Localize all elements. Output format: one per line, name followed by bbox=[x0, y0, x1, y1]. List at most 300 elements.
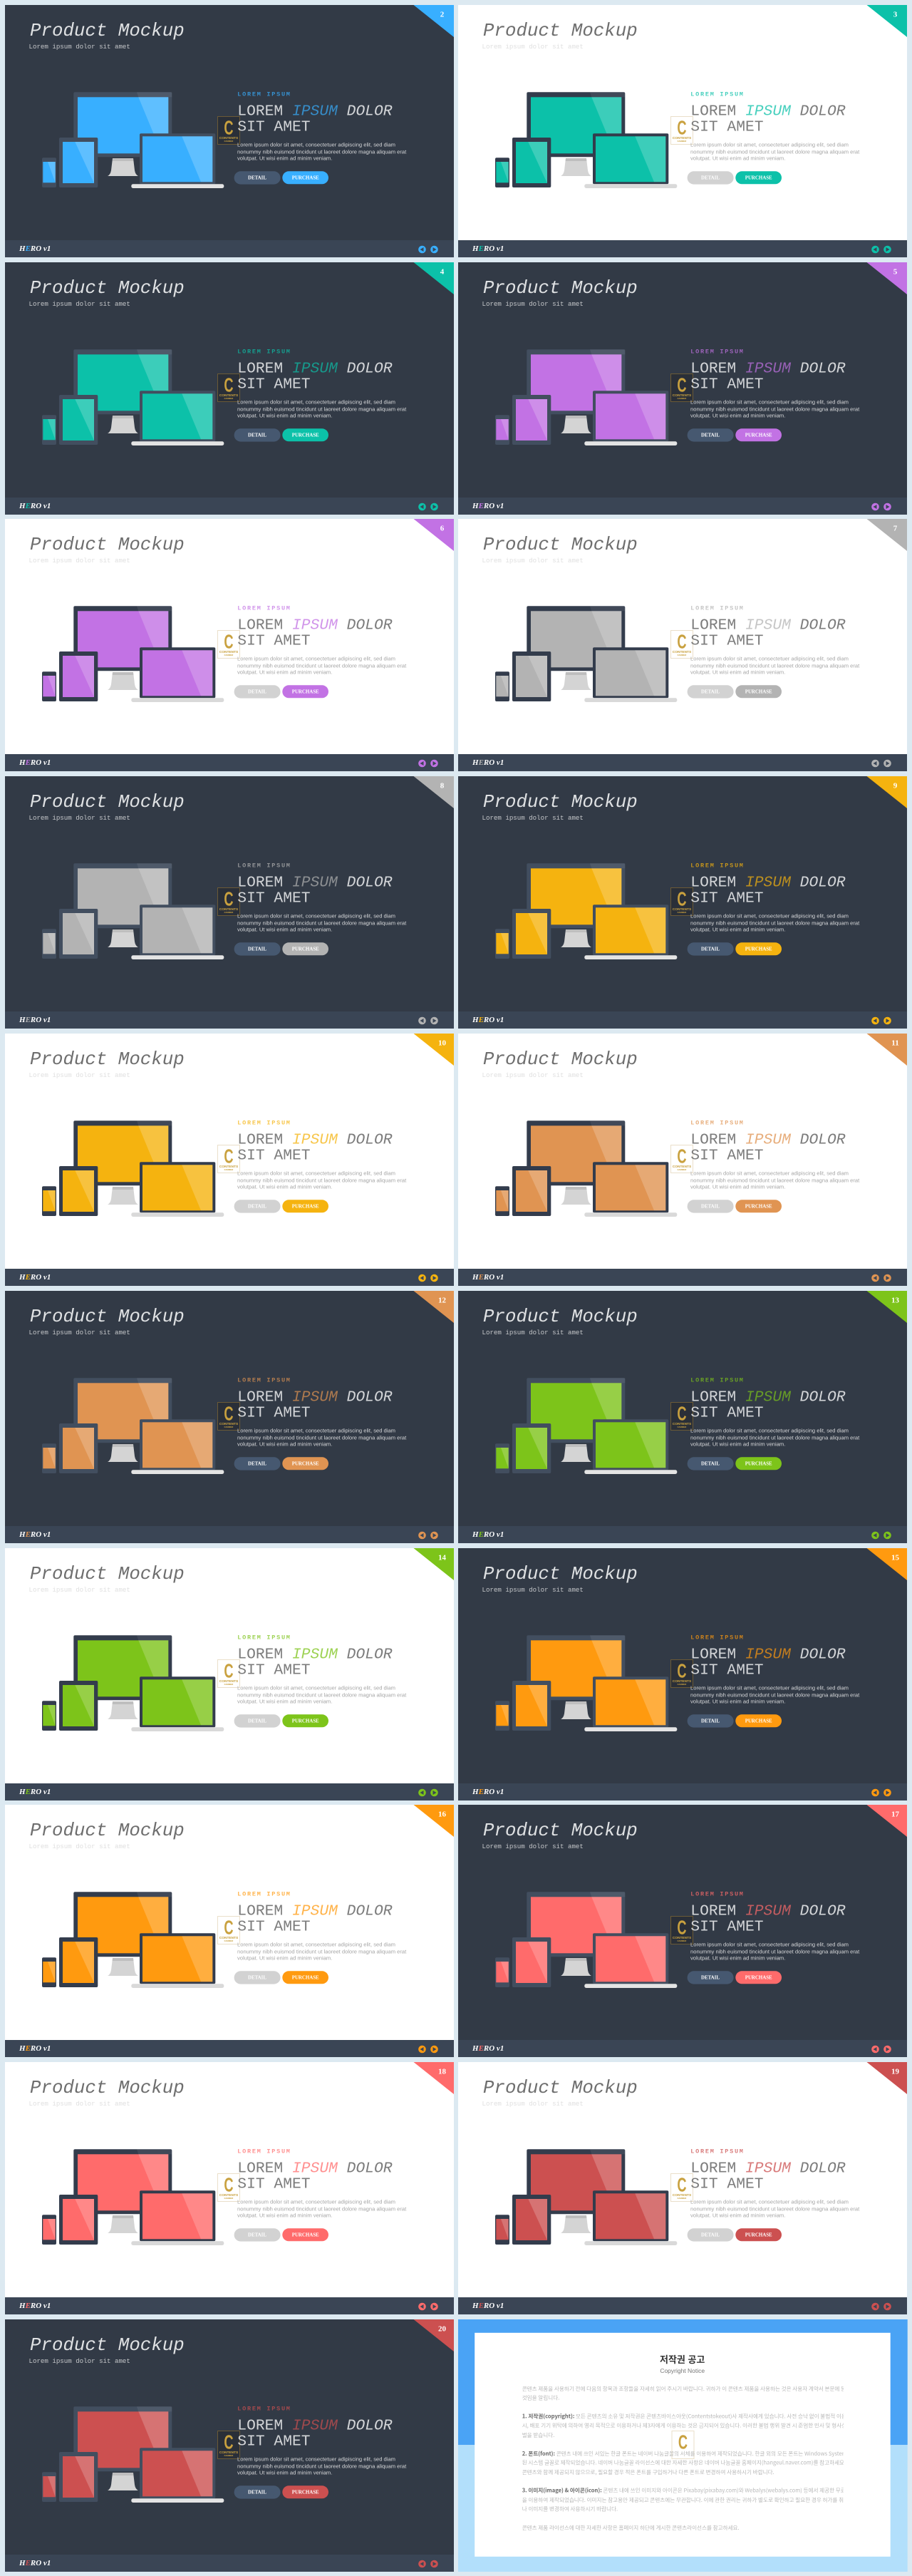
corner tag: 19 bbox=[891, 2068, 900, 2076]
heading: SIT AMET bbox=[691, 376, 764, 393]
body text: nonummy nibh euismod tincidunt ut laoreet dolore magna aliquam erat bbox=[690, 1177, 860, 1183]
button purchase: PURCHASE bbox=[291, 1461, 319, 1466]
button detail bbox=[688, 1972, 734, 1984]
watermark badge bbox=[217, 2174, 239, 2202]
watermark badge: FARMER bbox=[224, 1426, 234, 1428]
corner tag: 15 bbox=[891, 1553, 900, 1562]
heading: SIT AMET bbox=[237, 1404, 310, 1421]
button purchase bbox=[282, 1972, 328, 1984]
watermark badge: CONTENTS bbox=[673, 393, 692, 398]
notice body: 3. 이미지(image) & 아이콘(icon): 콘텐츠 내에 쓰인 이미지와 아이콘은 Pixabay(pixabay.com)와 Webalys(webalys.com) 등에서 제공한 무료 저작물 bbox=[522, 2486, 862, 2494]
corner tag: 7 bbox=[893, 525, 898, 533]
heading: SIT AMET bbox=[691, 2176, 764, 2193]
footer bar bbox=[4, 1269, 453, 1286]
heading bbox=[237, 2417, 392, 2451]
body text: Lorem ipsum dolor sit amet, consectetuer adipiscing elit, sed diam bbox=[690, 1170, 849, 1176]
watermark badge: CONTENTS bbox=[219, 650, 238, 654]
watermark badge bbox=[217, 2431, 239, 2458]
watermark badge: C bbox=[224, 632, 233, 654]
watermark badge: C bbox=[678, 2432, 688, 2454]
heading bbox=[237, 1903, 392, 1936]
panel: slide 4 dark teal bbox=[5, 262, 454, 515]
footer label: HERO v1 bbox=[472, 2302, 504, 2310]
nav arrows bbox=[418, 2046, 437, 2054]
subtitle: Lorem ipsum dolor sit amet bbox=[28, 2100, 130, 2108]
watermark badge: C bbox=[678, 632, 687, 654]
device mockups bbox=[495, 349, 678, 445]
corner tag bbox=[413, 1291, 453, 1323]
title: Product Mockup bbox=[30, 2078, 184, 2098]
corner tag bbox=[867, 2062, 907, 2094]
notice body: 된 시스템 글꼴로 제작되었습니다. 네이버 나눔글꼴 라이선스에 대한 자세한 사항은 네이버 나눔글꼴 홈페이지(hangeul.naver.com)를 참고하세요. 폰트는 bbox=[522, 2458, 862, 2466]
footer label: HERO v1 bbox=[19, 502, 51, 510]
title: Product Mockup bbox=[483, 535, 638, 555]
corner tag bbox=[413, 262, 453, 294]
title: Product Mockup bbox=[483, 792, 638, 813]
panel: slide 8 dark grey bbox=[5, 776, 454, 1029]
button purchase bbox=[736, 1972, 782, 1984]
button purchase: PURCHASE bbox=[291, 690, 319, 695]
heading: SIT AMET bbox=[237, 2176, 310, 2193]
watermark badge: FARMER bbox=[224, 2454, 234, 2457]
title: Product Mockup bbox=[483, 1820, 638, 1841]
watermark badge: C bbox=[678, 889, 687, 911]
footer label: HERO v1 bbox=[472, 502, 504, 510]
notice body: 나 이미지를 변경하여 사용하시기 바랍니다. bbox=[522, 2505, 618, 2513]
heading: SIT AMET bbox=[237, 1661, 310, 1679]
heading bbox=[691, 1389, 846, 1421]
body text bbox=[237, 398, 407, 418]
eyebrow: LOREM IPSUM bbox=[237, 1376, 291, 1384]
button purchase: PURCHASE bbox=[291, 1719, 319, 1724]
body text: nonummy nibh euismod tincidunt ut laoreet dolore magna aliquam erat bbox=[690, 663, 860, 669]
footer label: HERO v1 bbox=[472, 1788, 504, 1796]
title: Product Mockup bbox=[30, 21, 184, 41]
panel: slide 12 dark tan bbox=[5, 1291, 454, 1543]
nav arrows bbox=[418, 760, 437, 768]
corner tag: 17 bbox=[891, 1810, 900, 1819]
title: Product Mockup bbox=[30, 1820, 184, 1841]
watermark badge: C bbox=[678, 1660, 687, 1682]
watermark badge: FARMER bbox=[224, 1682, 234, 1685]
footer label: HERO v1 bbox=[19, 2044, 51, 2053]
eyebrow: LOREM IPSUM bbox=[691, 91, 745, 98]
nav arrows bbox=[418, 2560, 437, 2567]
heading: LOREM IPSUM DOLOR bbox=[691, 617, 846, 634]
device mockups bbox=[41, 1635, 224, 1731]
button purchase: PURCHASE bbox=[745, 2233, 772, 2238]
subtitle: Lorem ipsum dolor sit amet bbox=[482, 299, 584, 308]
footer bar bbox=[458, 240, 907, 257]
watermark badge: CONTENTS bbox=[673, 1165, 692, 1169]
nav arrows bbox=[871, 2303, 891, 2310]
watermark badge: CONTENTS bbox=[673, 1936, 692, 1940]
nav arrows bbox=[871, 1274, 891, 1282]
body text: volutpat. Ut wisi enim ad minim veniam. bbox=[690, 927, 786, 933]
corner tag bbox=[413, 776, 453, 808]
footer bar bbox=[4, 240, 453, 257]
body text bbox=[690, 656, 860, 676]
footer bar bbox=[4, 1526, 453, 1543]
watermark badge: FARMER bbox=[224, 1168, 234, 1171]
button detail: DETAIL bbox=[701, 1976, 720, 1981]
corner tag: 8 bbox=[440, 782, 444, 790]
body text: nonummy nibh euismod tincidunt ut laoreet dolore magna aliquam erat bbox=[690, 406, 860, 412]
nav arrows bbox=[871, 245, 891, 253]
subtitle: Lorem ipsum dolor sit amet bbox=[482, 1329, 584, 1336]
button detail bbox=[688, 428, 734, 441]
heading bbox=[237, 103, 392, 135]
watermark badge: FARMER bbox=[678, 1426, 687, 1428]
subtitle: Lorem ipsum dolor sit amet bbox=[482, 1585, 584, 1594]
heading: LOREM IPSUM DOLOR bbox=[237, 103, 392, 120]
body text bbox=[690, 1942, 860, 1962]
heading bbox=[237, 1646, 392, 1679]
watermark badge: CONTENTS bbox=[219, 2193, 238, 2198]
heading bbox=[691, 1646, 846, 1679]
body text: Lorem ipsum dolor sit amet, consectetuer adipiscing elit, sed diam bbox=[237, 141, 395, 148]
device mockups bbox=[495, 1892, 678, 1988]
button purchase bbox=[282, 1714, 328, 1727]
white notice card bbox=[475, 2333, 891, 2557]
button detail: DETAIL bbox=[248, 433, 266, 438]
body text: nonummy nibh euismod tincidunt ut laoreet dolore magna aliquam erat bbox=[690, 919, 860, 926]
heading bbox=[691, 360, 846, 393]
subtitle: Lorem ipsum dolor sit amet bbox=[482, 1843, 584, 1850]
button purchase: PURCHASE bbox=[291, 2490, 319, 2495]
body text: volutpat. Ut wisi enim ad minim veniam. bbox=[237, 2212, 332, 2219]
title: Product Mockup bbox=[483, 21, 638, 41]
button purchase: PURCHASE bbox=[291, 947, 319, 952]
button purchase bbox=[736, 942, 782, 955]
body text: Lorem ipsum dolor sit amet, consectetuer adipiscing elit, sed diam bbox=[237, 1684, 395, 1691]
button purchase bbox=[736, 1200, 782, 1212]
nav arrows bbox=[418, 245, 437, 253]
notice body: 콘텐츠 제품 라이선스에 대한 자세한 사항은 홈페이지 하단에 게시한 콘텐츠라이선스를 참고하세요. bbox=[522, 2524, 740, 2532]
nav arrows bbox=[418, 1274, 437, 1282]
watermark badge: FARMER bbox=[678, 1168, 687, 1171]
panel: slide 3 light teal bbox=[458, 5, 907, 257]
button detail: DETAIL bbox=[701, 1719, 720, 1724]
watermark badge: CONTENTS bbox=[219, 1936, 238, 1940]
device mockups bbox=[495, 1120, 678, 1217]
watermark badge: CONTENTS bbox=[219, 2451, 238, 2455]
button detail bbox=[234, 2485, 280, 2498]
heading: LOREM IPSUM DOLOR bbox=[237, 617, 392, 634]
watermark badge bbox=[217, 1145, 239, 1173]
watermark badge: CONTENTS bbox=[673, 650, 692, 654]
button detail bbox=[234, 1972, 280, 1984]
footer label: HERO v1 bbox=[19, 2559, 51, 2567]
nav arrows bbox=[418, 1788, 437, 1796]
title: Product Mockup bbox=[483, 1049, 638, 1070]
eyebrow: LOREM IPSUM bbox=[691, 1376, 745, 1384]
watermark badge: CONTENTS bbox=[219, 1679, 238, 1684]
background bands bbox=[458, 2319, 908, 2572]
heading: LOREM IPSUM DOLOR bbox=[691, 1389, 846, 1406]
body text bbox=[237, 141, 407, 161]
watermark badge bbox=[672, 2431, 694, 2458]
notice body: 시, 배포 기기 위탁에 의하여 영리 목적으로 이용하거나 제3자에게 이용하는 것은 금지되어 있습니다. 이러한 불법 행위 발견 시 준엄한 민사 및 형사상의 처 bbox=[522, 2421, 858, 2429]
heading bbox=[237, 360, 392, 393]
watermark badge: FARMER bbox=[224, 654, 234, 656]
body text: Lorem ipsum dolor sit amet, consectetuer adipiscing elit, sed diam bbox=[690, 912, 849, 919]
button purchase bbox=[282, 1200, 328, 1212]
heading: LOREM IPSUM DOLOR bbox=[237, 1389, 392, 1406]
button purchase bbox=[282, 942, 328, 955]
eyebrow: LOREM IPSUM bbox=[691, 1634, 745, 1641]
corner tag: 16 bbox=[437, 1810, 446, 1819]
body text: nonummy nibh euismod tincidunt ut laoreet dolore magna aliquam erat bbox=[237, 919, 407, 926]
panel: slide 17 dark pink bbox=[458, 1805, 907, 2057]
panel: copyright notice bbox=[458, 2319, 908, 2572]
button detail: DETAIL bbox=[248, 947, 266, 952]
body text: volutpat. Ut wisi enim ad minim veniam. bbox=[237, 1955, 332, 1962]
button purchase bbox=[282, 2485, 328, 2498]
eyebrow: LOREM IPSUM bbox=[237, 348, 291, 355]
footer bar bbox=[4, 1011, 453, 1029]
subtitle: Lorem ipsum dolor sit amet bbox=[28, 1329, 130, 1336]
body text bbox=[237, 2456, 407, 2475]
button detail: DETAIL bbox=[248, 175, 266, 180]
heading: LOREM IPSUM DOLOR bbox=[691, 1646, 846, 1663]
device mockups bbox=[41, 1892, 224, 1988]
subtitle: Lorem ipsum dolor sit amet bbox=[482, 2100, 584, 2108]
heading: LOREM IPSUM DOLOR bbox=[691, 1131, 846, 1148]
heading: LOREM IPSUM DOLOR bbox=[691, 1903, 846, 1920]
heading: SIT AMET bbox=[237, 1148, 310, 1165]
footer label: HERO v1 bbox=[472, 1016, 504, 1024]
button detail: DETAIL bbox=[248, 690, 266, 695]
button purchase: PURCHASE bbox=[291, 175, 319, 180]
button detail: DETAIL bbox=[701, 2233, 720, 2238]
footer label: HERO v1 bbox=[472, 758, 504, 767]
subtitle: Lorem ipsum dolor sit amet bbox=[28, 1843, 130, 1850]
notice body: 을 이용하여 제작되었습니다. 이미지는 참고용만 제공되고 콘텐츠에는 무관합니다. 이에 관한 권리는 귀하가 별도로 확인하고 필요한 경우 허가를 취득하거 bbox=[522, 2496, 859, 2504]
button detail: DETAIL bbox=[701, 947, 720, 952]
title: Product Mockup bbox=[30, 1564, 184, 1584]
eyebrow: LOREM IPSUM bbox=[237, 91, 291, 98]
heading bbox=[691, 1903, 846, 1936]
body text bbox=[690, 1427, 860, 1447]
button detail: DETAIL bbox=[701, 433, 720, 438]
body text: Lorem ipsum dolor sit amet, consectetuer adipiscing elit, sed diam bbox=[237, 912, 395, 919]
corner tag bbox=[867, 1548, 907, 1580]
button purchase: PURCHASE bbox=[745, 947, 772, 952]
body text: Lorem ipsum dolor sit amet, consectetuer adipiscing elit, sed diam bbox=[690, 398, 849, 405]
watermark badge: CONTENTS bbox=[673, 136, 692, 140]
device mockups bbox=[41, 607, 224, 702]
body text: volutpat. Ut wisi enim ad minim veniam. bbox=[690, 1183, 786, 1190]
footer bar bbox=[458, 1526, 907, 1543]
footer bar bbox=[458, 2040, 907, 2057]
body text: volutpat. Ut wisi enim ad minim veniam. bbox=[237, 155, 332, 161]
corner tag: 6 bbox=[440, 525, 444, 533]
watermark badge bbox=[671, 1402, 693, 1430]
notice body: 2. 폰트(font): 콘텐츠 내에 쓰인 서있는 한글 폰트는 네이버 나눔글꼴의 서체를 이용하여 제작되었습니다. 한글 외의 모든 폰트는 Windows System에 포함 bbox=[522, 2450, 864, 2458]
device mockups bbox=[41, 1378, 224, 1474]
body text: nonummy nibh euismod tincidunt ut laoreet dolore magna aliquam erat bbox=[237, 1177, 407, 1183]
watermark badge: C bbox=[224, 1917, 233, 1939]
corner tag: 11 bbox=[892, 1039, 899, 1047]
body text: nonummy nibh euismod tincidunt ut laoreet dolore magna aliquam erat bbox=[690, 2205, 860, 2212]
nav arrows bbox=[871, 760, 891, 768]
heading: SIT AMET bbox=[691, 118, 764, 135]
notice body: 벌을 받습니다. bbox=[522, 2431, 555, 2439]
button detail: DETAIL bbox=[248, 1461, 266, 1466]
title: Product Mockup bbox=[30, 535, 184, 555]
body text: Lorem ipsum dolor sit amet, consectetuer adipiscing elit, sed diam bbox=[237, 1942, 395, 1948]
watermark badge: C bbox=[678, 1146, 687, 1168]
watermark badge: C bbox=[678, 1403, 687, 1425]
body text: volutpat. Ut wisi enim ad minim veniam. bbox=[237, 1441, 332, 1447]
subtitle: Lorem ipsum dolor sit amet bbox=[28, 2357, 130, 2365]
corner tag: 10 bbox=[437, 1039, 446, 1047]
button detail: DETAIL bbox=[248, 1719, 266, 1724]
heading: LOREM IPSUM DOLOR bbox=[237, 2417, 392, 2434]
watermark badge: C bbox=[678, 1917, 687, 1939]
watermark badge bbox=[217, 373, 239, 401]
body text: Lorem ipsum dolor sit amet, consectetuer adipiscing elit, sed diam bbox=[237, 2456, 395, 2462]
corner tag bbox=[867, 519, 907, 551]
notice body: 1. 저작권(copyright): 모든 콘텐츠의 소유 및 저작권은 콘텐츠바이스아웃(Contentstokeout)사 제작사에게 있습니다. 사전 승낙 없이 불법적 이용, 무단전 bbox=[522, 2412, 864, 2420]
title: Product Mockup bbox=[30, 1307, 184, 1327]
heading: LOREM IPSUM DOLOR bbox=[237, 1131, 392, 1148]
nav arrows bbox=[871, 503, 891, 510]
panel: slide 5 dark purple bbox=[458, 262, 907, 515]
body text bbox=[237, 2198, 407, 2219]
corner tag bbox=[413, 1805, 453, 1837]
watermark badge bbox=[671, 2174, 693, 2202]
body text bbox=[237, 1684, 407, 1704]
subtitle: Lorem ipsum dolor sit amet bbox=[28, 1071, 130, 1079]
eyebrow: LOREM IPSUM bbox=[237, 2148, 291, 2155]
footer label: HERO v1 bbox=[19, 758, 51, 767]
corner tag: 12 bbox=[437, 1296, 446, 1304]
subtitle: Lorem ipsum dolor sit amet bbox=[482, 557, 584, 565]
button purchase bbox=[282, 686, 328, 699]
panel: slide 13 dark green bbox=[458, 1291, 907, 1543]
footer label: HERO v1 bbox=[472, 1273, 504, 1282]
button detail: DETAIL bbox=[701, 1461, 720, 1466]
body text: Lorem ipsum dolor sit amet, consectetuer adipiscing elit, sed diam bbox=[690, 1684, 849, 1691]
watermark badge: C bbox=[224, 117, 233, 139]
button purchase: PURCHASE bbox=[745, 175, 772, 180]
watermark badge: C bbox=[224, 374, 233, 396]
corner tag bbox=[413, 1548, 453, 1580]
panel: slide 10 light yellow bbox=[5, 1034, 454, 1286]
watermark badge: FARMER bbox=[224, 140, 234, 143]
button detail bbox=[234, 1457, 280, 1470]
body text: Lorem ipsum dolor sit amet, consectetuer adipiscing elit, sed diam bbox=[690, 141, 849, 148]
body text: volutpat. Ut wisi enim ad minim veniam. bbox=[690, 155, 786, 161]
corner tag: 14 bbox=[437, 1553, 446, 1562]
watermark badge: FARMER bbox=[678, 2197, 687, 2200]
heading: LOREM IPSUM DOLOR bbox=[691, 103, 846, 120]
watermark badge: FARMER bbox=[224, 396, 234, 399]
device mockups bbox=[41, 2406, 224, 2503]
panel: slide 20 dark red bbox=[5, 2319, 454, 2572]
button detail bbox=[688, 2228, 734, 2242]
heading: SIT AMET bbox=[691, 633, 764, 650]
button purchase: PURCHASE bbox=[745, 1204, 772, 1209]
footer bar bbox=[458, 1011, 907, 1029]
heading bbox=[691, 617, 846, 650]
watermark badge bbox=[217, 631, 239, 659]
watermark badge: C bbox=[224, 1660, 233, 1682]
subtitle: Lorem ipsum dolor sit amet bbox=[482, 814, 584, 822]
nav arrows bbox=[871, 1788, 891, 1796]
watermark badge: C bbox=[224, 1146, 233, 1168]
subtitle: Lorem ipsum dolor sit amet bbox=[28, 557, 130, 565]
eyebrow: LOREM IPSUM bbox=[691, 2148, 745, 2155]
watermark badge bbox=[217, 1402, 239, 1430]
body text: Lorem ipsum dolor sit amet, consectetuer adipiscing elit, sed diam bbox=[690, 1427, 849, 1433]
heading: SIT AMET bbox=[691, 1148, 764, 1165]
body text: Lorem ipsum dolor sit amet, consectetuer adipiscing elit, sed diam bbox=[690, 2198, 849, 2205]
watermark badge: C bbox=[678, 374, 687, 396]
watermark badge: C bbox=[224, 2175, 233, 2197]
nav arrows bbox=[871, 1017, 891, 1024]
button detail bbox=[234, 686, 280, 699]
heading: SIT AMET bbox=[691, 1661, 764, 1679]
nav arrows bbox=[418, 1017, 437, 1024]
corner tag: 18 bbox=[437, 2068, 446, 2076]
button detail bbox=[688, 1714, 734, 1727]
button purchase: PURCHASE bbox=[745, 1461, 772, 1466]
button detail: DETAIL bbox=[248, 1204, 266, 1209]
notice body: 것임을 알립니다. bbox=[522, 2394, 560, 2401]
footer bar bbox=[4, 2555, 453, 2572]
panel: slide 9 dark yellow bbox=[458, 776, 907, 1029]
watermark badge bbox=[671, 1145, 693, 1173]
button purchase: PURCHASE bbox=[291, 433, 319, 438]
button purchase bbox=[282, 171, 328, 184]
watermark badge: C bbox=[224, 889, 233, 911]
watermark badge: FARMER bbox=[678, 396, 687, 399]
panel: slide 2 dark blue bbox=[5, 5, 454, 257]
body text: volutpat. Ut wisi enim ad minim veniam. bbox=[690, 2212, 786, 2219]
heading bbox=[691, 1131, 846, 1165]
heading: SIT AMET bbox=[237, 2433, 310, 2451]
body text: nonummy nibh euismod tincidunt ut laoreet dolore magna aliquam erat bbox=[237, 406, 407, 412]
body text bbox=[690, 2198, 860, 2219]
nav arrows bbox=[418, 2303, 437, 2310]
body text: Lorem ipsum dolor sit amet, consectetuer adipiscing elit, sed diam bbox=[237, 1427, 395, 1433]
title: Product Mockup bbox=[483, 2078, 638, 2098]
panel: slide 19 light red bbox=[458, 2062, 907, 2314]
footer bar bbox=[4, 2297, 453, 2314]
device mockups bbox=[495, 92, 678, 188]
title: Product Mockup bbox=[483, 1564, 638, 1584]
device mockups bbox=[495, 1378, 678, 1474]
title: Product Mockup bbox=[483, 278, 638, 298]
corner tag bbox=[413, 1034, 453, 1066]
footer bar bbox=[4, 2040, 453, 2057]
footer bar bbox=[458, 1269, 907, 1286]
button detail bbox=[234, 2228, 280, 2242]
eyebrow: LOREM IPSUM bbox=[691, 348, 745, 355]
title: Product Mockup bbox=[30, 792, 184, 813]
footer bar bbox=[458, 2297, 907, 2314]
watermark badge bbox=[217, 1659, 239, 1687]
footer label: HERO v1 bbox=[19, 244, 51, 253]
body text: nonummy nibh euismod tincidunt ut laoreet dolore magna aliquam erat bbox=[690, 148, 860, 155]
corner tag: 3 bbox=[893, 10, 898, 19]
button detail: DETAIL bbox=[701, 1204, 720, 1209]
heading bbox=[691, 874, 846, 907]
device mockups bbox=[495, 607, 678, 702]
